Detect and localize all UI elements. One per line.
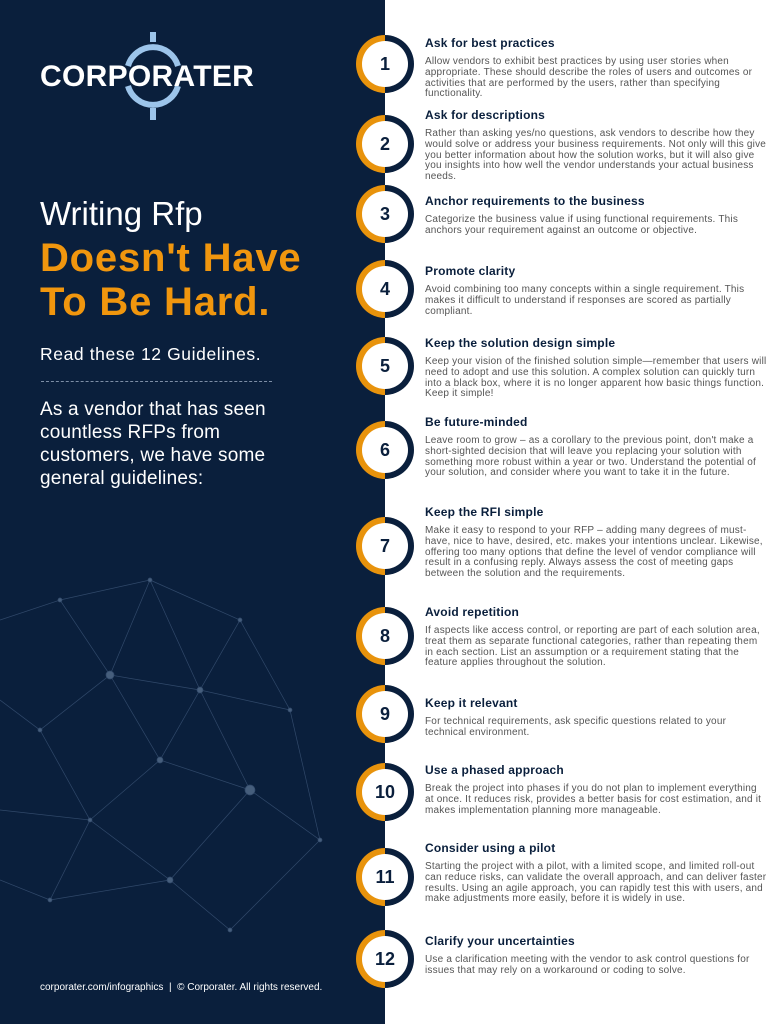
- item 10: Use a phased approach: [425, 763, 564, 777]
- text: 8: [380, 626, 390, 646]
- text: 7: [380, 536, 390, 556]
- item 1: Ask for best practices: [425, 36, 555, 50]
- item 4: Avoid combining too many concepts within a single requirement. This makes it difficult to understand if responses are scored as partially compliant.: [425, 284, 744, 317]
- item 10: [425, 763, 761, 816]
- item 11: [425, 841, 766, 904]
- title: Writing Rfp: [40, 195, 203, 232]
- item 12: [425, 934, 750, 976]
- title: [40, 195, 301, 324]
- logo: [40, 32, 254, 120]
- item 4: [425, 264, 744, 317]
- text: 9: [380, 704, 390, 724]
- item 3: Anchor requirements to the business: [425, 194, 645, 208]
- text: 4: [380, 279, 390, 299]
- item 10: Break the project into phases if you do not plan to implement everything at once. It reduces risk, provides a better basis for cost estimation, and it makes implementation planning more manageable.: [425, 783, 761, 816]
- text: 11: [375, 867, 395, 887]
- item 12: Use a clarification meeting with the vendor to ask control questions for issues that may rely on a workaround or coding to solve.: [425, 954, 750, 976]
- logo: CORPORATER: [40, 60, 254, 93]
- item 2: Ask for descriptions: [425, 108, 545, 122]
- item 1: [425, 36, 752, 99]
- circles: 1: [380, 54, 390, 74]
- text: 2: [380, 134, 390, 154]
- left panel: [0, 0, 385, 1024]
- item 8: [425, 605, 760, 668]
- item 11: Starting the project with a pilot, with a limited scope, and limited roll-out can reduce risks, can validate the overall approach, and can deliver faster results. Using an agile approach, you can rapidly test this with users, and make adjustments more easily, before it is widely in use.: [425, 861, 766, 904]
- item 3: Categorize the business value if using functional requirements. This anchors your requirement against an outcome or objective.: [425, 214, 738, 236]
- network decoration: [0, 578, 322, 932]
- item 1: Allow vendors to exhibit best practices by using user stories when appropriate. These should describe the roles of users and outcomes or activities that are performed by the users, rather than specifying functionality.: [425, 56, 752, 99]
- item 9: [425, 696, 726, 738]
- item 8: Avoid repetition: [425, 605, 519, 619]
- text: 3: [380, 204, 390, 224]
- title: Doesn't Have: [40, 236, 301, 280]
- item 11: Consider using a pilot: [425, 841, 555, 855]
- item 6: [425, 415, 756, 478]
- title: To Be Hard.: [40, 280, 270, 324]
- subtitle: Read these 12 Guidelines.: [40, 344, 261, 364]
- intro text: As a vendor that has seen countless RFPs from customers, we have some general guidelines:: [40, 399, 266, 489]
- item 3: [425, 194, 738, 236]
- footer: corporater.com/infographics | © Corporater. All rights reserved.: [40, 982, 322, 993]
- item 6: Be future-minded: [425, 415, 528, 429]
- item 5: Keep the solution design simple: [425, 336, 615, 350]
- item 9: Keep it relevant: [425, 696, 518, 710]
- item 2: Rather than asking yes/no questions, ask vendors to describe how they would solve or address your business requirements. Not only will this give you better information about how the solution works, but it will also give you insights into how well the vendor understands your actual business needs.: [425, 128, 766, 182]
- item 5: Keep your vision of the finished solution simple—remember that users will need to adopt and use this solution. A complex solution can quickly turn into a black box, where it is no longer apparent how basic things function. Keep it simple!: [425, 356, 766, 399]
- text: 6: [380, 440, 390, 460]
- item 4: Promote clarity: [425, 264, 515, 278]
- item 7: Keep the RFI simple: [425, 505, 544, 519]
- item 12: Clarify your uncertainties: [425, 934, 575, 948]
- item 6: Leave room to grow – as a corollary to the previous point, don't make a short-sighted decision that will leave you replacing your solution with something more robust within a year or two. Understand the potential of your solution, and consider where you want to take it in the future.: [425, 435, 756, 478]
- item 9: For technical requirements, ask specific questions related to your technical environment.: [425, 716, 726, 738]
- item 8: If aspects like access control, or reporting are part of each solution area, treat them as separate functional categories, rather than repeating them in each section. List an assumption or a requirement stating that the feature applies throughout the solution.: [425, 625, 760, 668]
- item 5: [425, 336, 766, 399]
- text: 10: [375, 782, 395, 802]
- circles: [356, 35, 414, 93]
- item 7: Make it easy to respond to your RFP – adding many degrees of must-have, nice to have, desired, etc. makes your intentions unclear. Likewise, offering too many options that define the level of vendor compliance will result in a confusing reply. Always assess the cost of meeting gaps between the solution and the requirements.: [425, 525, 763, 579]
- text: 12: [375, 949, 395, 969]
- text: 5: [380, 356, 390, 376]
